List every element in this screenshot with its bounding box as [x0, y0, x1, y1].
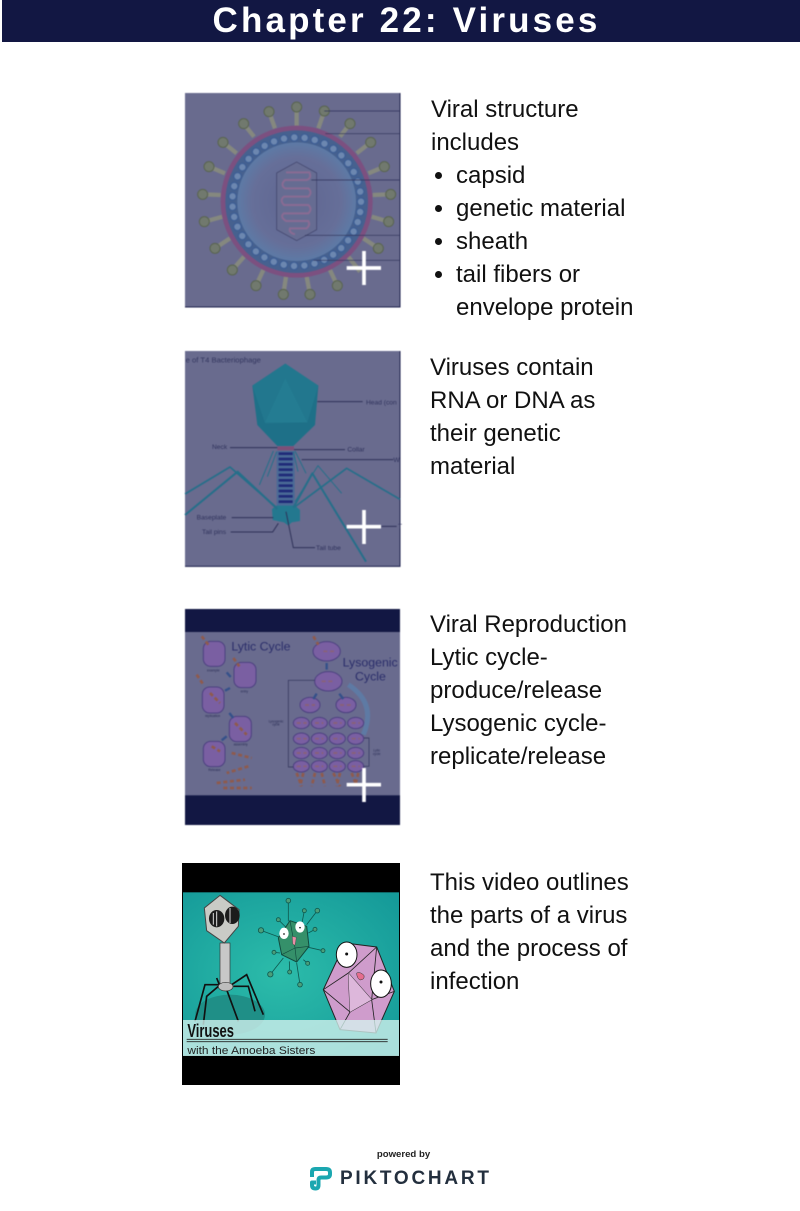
panel: video thumbnail: Viruses [187, 1020, 234, 1041]
text block: video description: and the process of [430, 935, 627, 962]
panel: lytic and lysogenic cycle image: replication [205, 714, 220, 718]
panel: lytic and lysogenic cycle image: assembly [234, 743, 248, 747]
text block: video description: This video outlines [430, 869, 629, 896]
title: Chapter 22: Viruses [213, 1, 600, 40]
panel: T4 bacteriophage image: W [393, 457, 400, 464]
panel: T4 bacteriophage image [184, 350, 402, 568]
text block: viral structure: tail fibers or envelope protein [456, 261, 633, 321]
footer: powered by Piktochart [310, 1149, 492, 1190]
panel: lytic and lysogenic cycle image: example [207, 669, 220, 673]
icon: plus [347, 768, 381, 802]
panel: lytic and lysogenic cycle image: Lytic [373, 748, 380, 752]
text block: video description: infection [430, 968, 519, 995]
text block: video description [430, 869, 629, 995]
panel: video thumbnail: with the Amoeba Sisters [186, 1045, 316, 1057]
footer: powered by Piktochart: powered by [377, 1149, 430, 1160]
green virus character [258, 898, 325, 987]
text block: viral structure [431, 96, 633, 321]
text block: viral structure: sheath [456, 228, 528, 255]
icon: plus [347, 251, 381, 285]
text block: genetic material: RNA or DNA as [430, 387, 595, 414]
panel: T4 bacteriophage image: Neck [212, 444, 228, 451]
text block: viral structure: capsid [456, 162, 525, 189]
text block: viral structure: genetic material [456, 195, 625, 222]
panel: video thumbnail [182, 863, 400, 1085]
text block: video description: the parts of a virus [430, 902, 627, 929]
panel: T4 bacteriophage image: Tail tube [316, 545, 341, 552]
text block: viral reproduction: Viral Reproduction [430, 611, 627, 638]
panel: lytic and lysogenic cycle image: Lysogenic [343, 655, 398, 669]
text block: genetic material: their genetic [430, 420, 561, 447]
panel: lytic and lysogenic cycle image: entry [241, 689, 248, 693]
panel: T4 bacteriophage image: Head (con [366, 399, 397, 406]
panel: lytic and lysogenic cycle image: Release [208, 768, 221, 772]
panel: lytic and lysogenic cycle image: Cycle [355, 670, 386, 684]
panel: T4 bacteriophage image: e of T4 Bacteriophage [186, 355, 261, 364]
text block: viral structure: Viral structure [431, 96, 579, 123]
text block: genetic material [430, 354, 595, 480]
panel: lytic and lysogenic cycle image [184, 608, 401, 826]
panel: T4 bacteriophage image: Baseplate [197, 515, 227, 522]
text block: genetic material: Viruses contain [430, 354, 594, 381]
text block: viral reproduction: produce/release [430, 677, 602, 704]
panel: lytic and lysogenic cycle image: Lysogenic [269, 719, 284, 723]
text block: genetic material: material [430, 453, 515, 480]
panel: T4 bacteriophage image: Collar [347, 446, 366, 453]
panel: lytic and lysogenic cycle image: cycle [373, 752, 381, 756]
icon: plus [347, 510, 381, 544]
footer: powered by Piktochart: PIKTOCHART [340, 1168, 492, 1189]
title [2, 0, 800, 42]
text block: viral reproduction [430, 611, 627, 770]
bacteriophage character [195, 895, 263, 1025]
text block: viral reproduction: Lysogenic cycle- [430, 710, 607, 737]
text block: viral reproduction: Lytic cycle- [430, 644, 548, 671]
banner [183, 1020, 399, 1056]
panel: lytic and lysogenic cycle image: cycle [272, 723, 280, 727]
pink virus character [323, 942, 394, 1033]
panel: T4 bacteriophage image: T [398, 523, 402, 530]
icon: Piktochart logo [310, 1167, 332, 1190]
panel: T4 bacteriophage image: Tail pins [202, 529, 227, 536]
text block: viral reproduction: replicate/release [430, 743, 606, 770]
text block: viral structure: includes [431, 129, 519, 156]
panel: lytic and lysogenic cycle image: Lytic Cycle [231, 639, 291, 653]
panel: viral structure image [184, 92, 402, 308]
